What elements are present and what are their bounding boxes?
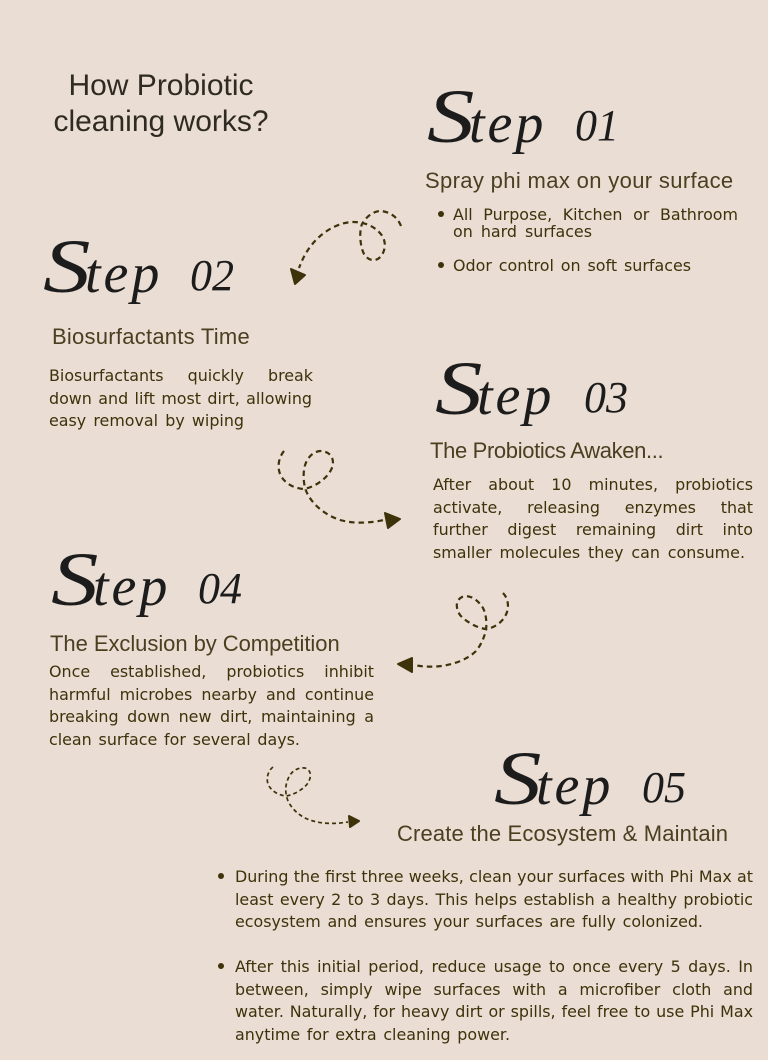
- list: step 05: After this initial period, reduce usage to once every 5 days. In: [235, 957, 753, 976]
- panel: step 05: [218, 736, 753, 1044]
- heading: step 02: S: [43, 224, 91, 309]
- heading: step 03: S: [435, 346, 483, 431]
- list: step 01: on hard surfaces: [453, 222, 592, 241]
- text: step 04: breaking down new dirt, maintaining a: [49, 707, 374, 726]
- title: How Probiotic: [68, 69, 254, 102]
- panel: step 03: [430, 346, 753, 562]
- list: step 05: water. Naturally, for heavy dirt or spills, feel free to use Phi Max: [235, 1002, 753, 1021]
- heading: step 05: S: [494, 736, 542, 821]
- text: step 02: down and lift most dirt, allowing: [49, 389, 312, 408]
- list: step 05: least every 2 to 3 days. This helps establish a healthy probiotic: [235, 890, 753, 909]
- panel: step 02: [43, 224, 313, 430]
- text: step 04: [49, 662, 374, 749]
- heading: step 01: [427, 74, 619, 159]
- heading: step 02: 02: [190, 251, 234, 300]
- heading: step 05: [494, 736, 686, 821]
- heading: step 04: 04: [198, 564, 242, 613]
- heading: step 02: [43, 224, 234, 309]
- text: step 04: harmful microbes nearby and continue: [49, 685, 374, 704]
- list: step 01: Odor control on soft surfaces: [453, 256, 691, 275]
- subheading: step 02: Biosurfactants Time: [52, 324, 250, 349]
- text: step 03: further digest remaining dirt into: [433, 520, 753, 539]
- heading: step 04: S: [51, 537, 99, 622]
- heading: step 04: [51, 537, 242, 622]
- panel: step 01: [425, 74, 738, 275]
- heading: step 03: tep: [477, 365, 554, 427]
- text: step 04: Once established, probiotics inhibit: [49, 662, 374, 681]
- text: step 02: Biosurfactants quickly break: [49, 366, 313, 385]
- heading: step 01: S: [427, 74, 475, 159]
- heading: step 05: tep: [536, 755, 613, 817]
- list: step 05: During the first three weeks, clean your surfaces with Phi Max at: [235, 867, 753, 886]
- list: step 05: ecosystem and ensures your surfaces are fully colonized.: [235, 912, 703, 931]
- heading: step 01: tep: [469, 93, 546, 155]
- text: step 03: [433, 475, 753, 562]
- heading: step 01: 01: [575, 101, 619, 150]
- text: step 04: clean surface for several days.: [49, 730, 300, 749]
- text: step 03: After about 10 minutes, probiotics: [433, 475, 753, 494]
- heading: step 04: tep: [93, 556, 170, 618]
- list: step 05: between, simply wipe surfaces with a microfiber cloth and: [235, 980, 753, 999]
- list: step 05: anytime for extra cleaning power.: [235, 1025, 510, 1044]
- list: step 01: [438, 205, 738, 275]
- title: [53, 69, 269, 138]
- heading: step 05: 05: [642, 763, 686, 812]
- list: step 01: All Purpose, Kitchen or Bathroom: [453, 205, 738, 224]
- subheading: step 03: The Probiotics Awaken...: [430, 438, 663, 463]
- title: cleaning works?: [53, 105, 269, 138]
- heading: step 03: 03: [584, 373, 628, 422]
- heading: step 02: tep: [85, 243, 162, 305]
- text: step 02: [49, 366, 313, 430]
- list: step 05: [218, 867, 753, 1044]
- subheading: step 01: Spray phi max on your surface: [425, 168, 734, 193]
- text: step 03: smaller molecules they can consume.: [433, 543, 745, 562]
- text: step 03: activate, releasing enzymes that: [433, 498, 753, 517]
- heading: step 03: [435, 346, 628, 431]
- panel: step 04: [49, 537, 374, 749]
- subheading: step 05: Create the Ecosystem & Maintain: [397, 821, 728, 846]
- text: step 02: easy removal by wiping: [49, 411, 244, 430]
- subheading: step 04: The Exclusion by Competition: [50, 631, 340, 656]
